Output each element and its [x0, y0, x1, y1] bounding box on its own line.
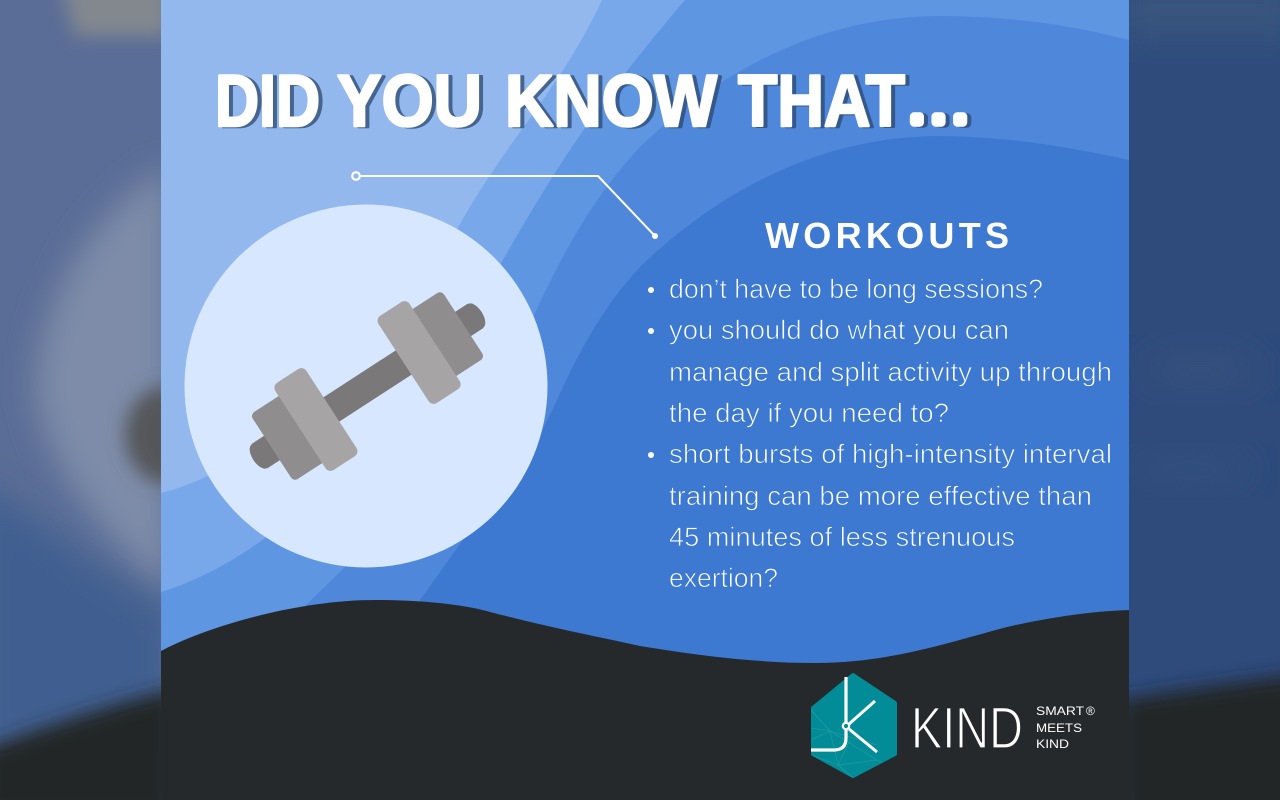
dark wave footer	[161, 600, 1129, 800]
logo: hexagon mark	[811, 675, 897, 778]
circle behind dumbbell	[184, 204, 548, 568]
title: DID	[215, 61, 320, 142]
bullet list: you should do what you can	[669, 315, 1009, 345]
bullet list: 45 minutes of less strenuous	[669, 522, 1015, 552]
bullet list	[648, 274, 1112, 593]
connector line	[352, 172, 658, 239]
logo: tagline: SMART	[1036, 704, 1085, 718]
title: KNOW	[505, 61, 717, 142]
logo: KIND wordmark: KIND	[911, 696, 1023, 761]
bullet list: don’t have to be long sessions?	[669, 274, 1043, 304]
logo: tagline: ®	[1086, 704, 1095, 718]
logo: tagline	[1036, 704, 1095, 751]
logo: tagline: KIND	[1036, 737, 1069, 751]
card background	[161, 0, 1129, 800]
icon: dumbbell	[225, 268, 510, 504]
blurred background left	[0, 0, 205, 800]
logo: tagline: MEETS	[1036, 721, 1082, 735]
bullet list: exertion?	[669, 563, 778, 593]
blurred background right	[1120, 0, 1280, 800]
bullet list: training can be more effective than	[669, 481, 1092, 511]
title: THAT	[738, 61, 905, 142]
bullet list: short bursts of high-intensity interval	[669, 439, 1112, 469]
bullet list: manage and split activity up through	[669, 357, 1112, 387]
title: ...	[911, 87, 976, 131]
bullet list: the day if you need to?	[669, 398, 949, 428]
heading: workouts: WORKOUTS	[765, 215, 1009, 256]
title: YOU	[337, 61, 482, 142]
title	[215, 61, 976, 142]
